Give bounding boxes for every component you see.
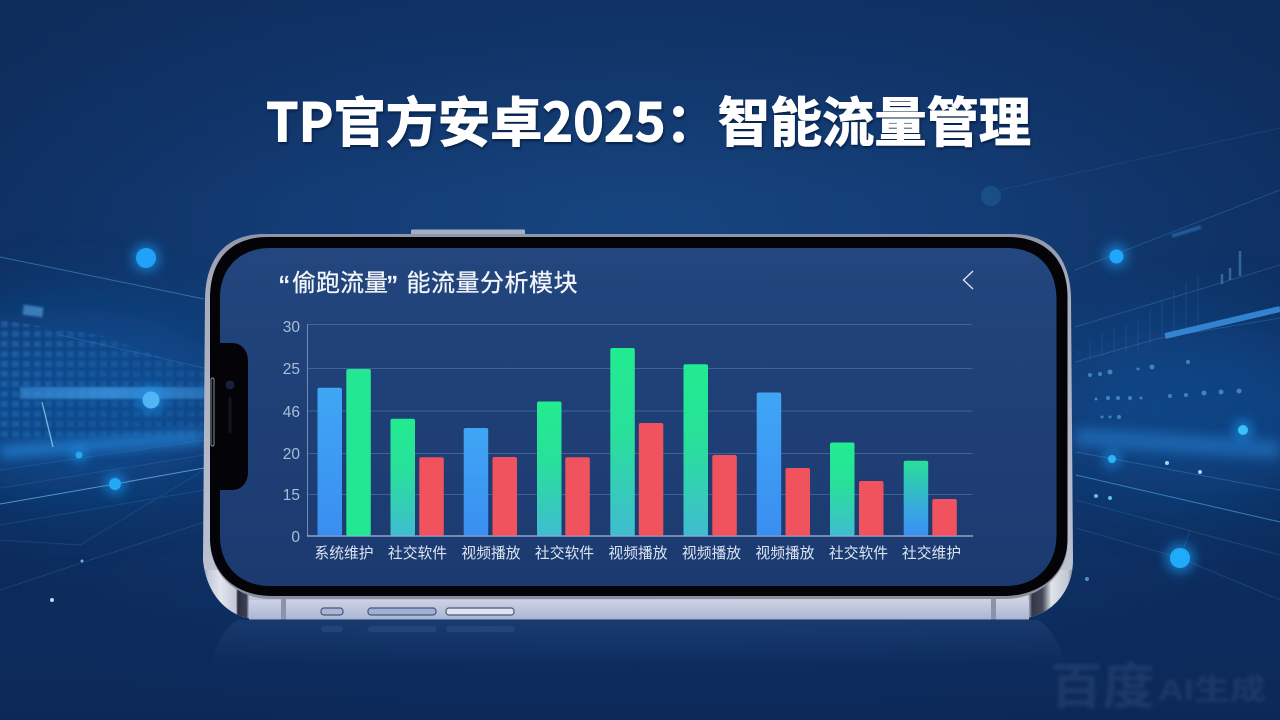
- phone lower metal corners: [204, 570, 1072, 618]
- y axis labels: 30: [283, 319, 300, 336]
- bars group 5: [610, 348, 663, 536]
- decoration: left data network: [0, 257, 205, 590]
- phone bezel: [210, 237, 1068, 596]
- phone screen: [220, 248, 1056, 586]
- x axis labels: 视频播放: [608, 545, 668, 562]
- bars group 3: [464, 428, 517, 536]
- y axis labels: 25: [283, 361, 300, 378]
- glowing nodes: [50, 186, 1252, 602]
- y axis labels: [283, 319, 300, 546]
- back chevron icon: [964, 271, 973, 289]
- decoration: right data network: [1075, 190, 1280, 600]
- y axis labels: 15: [283, 487, 300, 504]
- bars group 1: [318, 369, 371, 536]
- phone: [203, 230, 1073, 620]
- title: TP官方安卓2025：智能流量管理: [266, 80, 1031, 158]
- x axis labels: 视频播放: [755, 545, 815, 562]
- notch speaker and camera: [211, 378, 234, 446]
- bar chart: [283, 319, 973, 562]
- watermark: 百度: [1050, 659, 1155, 715]
- bars group 9: [904, 461, 957, 536]
- phone metal frame: [203, 234, 1073, 620]
- watermark: [1050, 659, 1266, 715]
- x axis labels: 社交软件: [829, 544, 888, 562]
- x axis labels: 社交软件: [535, 544, 594, 562]
- x axis labels: 系统维护: [314, 545, 374, 562]
- screen heading: “: [279, 269, 289, 304]
- x axis labels: 社交维护: [902, 544, 961, 562]
- screen heading: 能流量分析模块: [406, 263, 578, 298]
- phone reflection: [212, 620, 1064, 668]
- bars group 2: [390, 419, 444, 536]
- bars group 8: [830, 442, 884, 536]
- watermark: AI生成: [1158, 674, 1266, 707]
- phone antenna lines: [281, 598, 996, 620]
- bars group 4: [537, 402, 590, 536]
- bars group 6: [684, 364, 737, 536]
- phone side buttons: [321, 608, 514, 615]
- y axis labels: 20: [283, 446, 300, 463]
- x axis labels: 视频播放: [461, 545, 521, 562]
- x axis labels: [314, 544, 961, 562]
- y axis labels: 0: [291, 529, 300, 546]
- phone top button: [411, 230, 525, 234]
- screen heading: ”: [387, 269, 397, 304]
- x axis labels: 视频播放: [682, 545, 741, 562]
- y axis labels: 46: [283, 404, 300, 421]
- phone side band: [249, 600, 1029, 620]
- phone edge highlight: [212, 548, 1066, 598]
- screen heading: 偷跑流量: [292, 263, 388, 298]
- bars group 7: [757, 392, 810, 536]
- x axis labels: 社交软件: [388, 544, 447, 562]
